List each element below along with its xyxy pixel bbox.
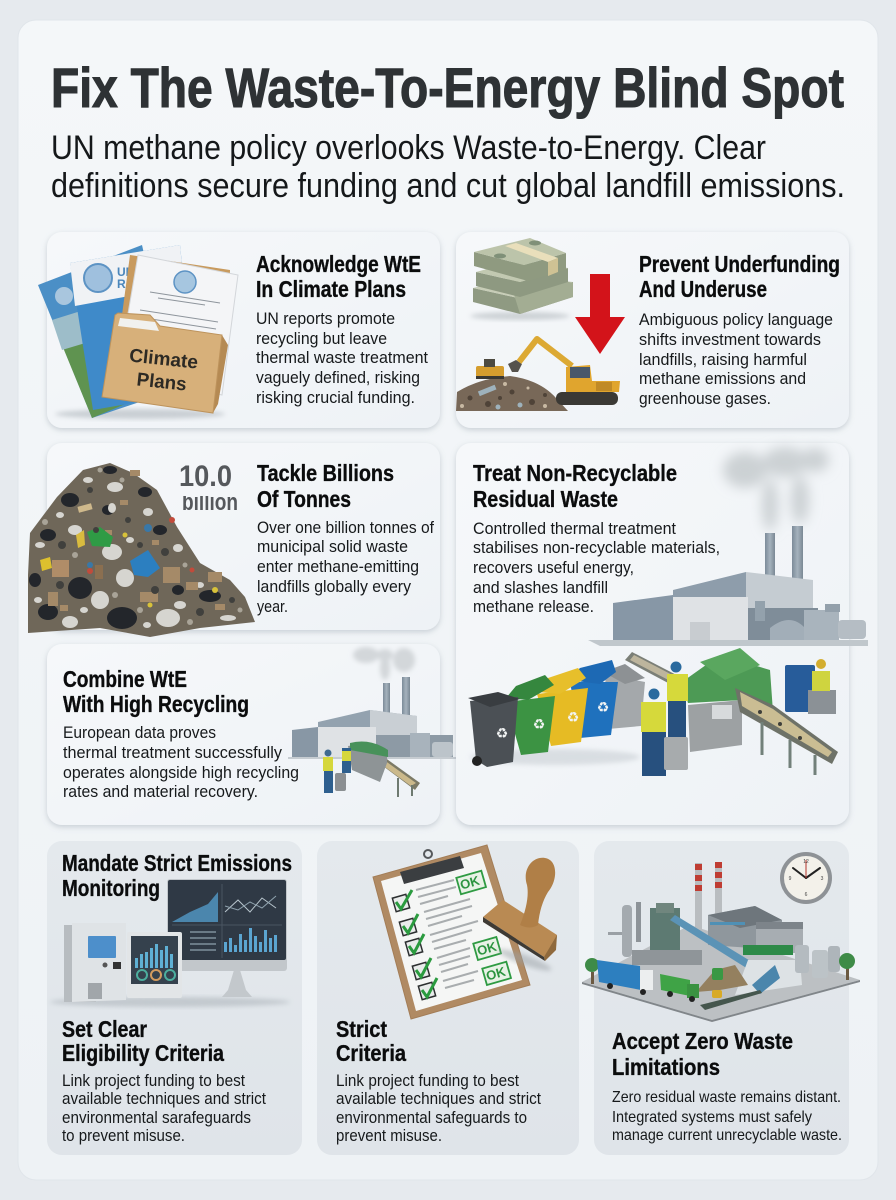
body text: greenhouse gases. (639, 389, 771, 408)
stat: 10.0 billion: billion (182, 489, 238, 516)
icon: small plant with sorting line (288, 647, 456, 797)
body text: prevent misuse. (336, 1126, 442, 1145)
body text: to prevent misuse. (62, 1126, 185, 1145)
heading: mandate strict emissions monitoring: Monitoring (62, 875, 160, 901)
icon: smoke plumes (723, 447, 829, 531)
panel: acknowledge WtE in climate plans (38, 232, 440, 428)
heading: mandate strict emissions monitoring (62, 850, 292, 901)
body text (63, 723, 299, 801)
heading (612, 1028, 793, 1080)
body text: thermal treatment successfully (63, 743, 282, 762)
body text: landfills, raising harmful (639, 350, 807, 369)
panel: strict criteria (317, 841, 579, 1155)
body text (336, 1071, 541, 1145)
subtitle: UN methane policy overlooks Waste-to-Energy. Clear (51, 129, 766, 167)
heading (63, 666, 249, 717)
heading (336, 1016, 406, 1066)
body text: methane emissions and (639, 369, 806, 388)
heading: Limitations (612, 1054, 720, 1080)
icon: climate plan reports and folder: R (117, 277, 126, 291)
body text: Over one billion tonnes of (257, 518, 434, 537)
body text: European data proves (63, 723, 216, 742)
heading: In Climate Plans (256, 276, 406, 302)
panel: treat non-recyclable residual waste (456, 443, 868, 825)
heading: Accept Zero Waste (612, 1028, 793, 1054)
icon: wooden stamp (483, 858, 557, 974)
heading: And Underuse (639, 276, 767, 302)
body text: municipal solid waste (257, 537, 408, 556)
heading: With High Recycling (63, 691, 249, 717)
body text: and slashes landfill (473, 578, 608, 597)
heading: mandate strict emissions monitoring: Mandate Strict Emissions (62, 850, 292, 876)
body text: shifts investment towards (639, 330, 821, 349)
subtitle (51, 129, 845, 205)
heading (256, 251, 421, 302)
icon: waste pile (28, 463, 255, 637)
body text: thermal waste treatment (256, 348, 428, 367)
icon: waste sorting line (625, 648, 838, 776)
body text: available techniques and strict (62, 1089, 266, 1108)
heading (62, 1016, 224, 1066)
icon: checklist clipboard: OK (484, 964, 508, 984)
panel: prevent underfunding and underuse (456, 232, 849, 428)
panel: combine WtE with high recycling (47, 644, 456, 825)
body text: recovers useful energy, (473, 558, 634, 577)
icon: landfill with excavator (456, 339, 620, 411)
body text: Link project funding to best (336, 1071, 519, 1090)
body text: UN reports promote (256, 309, 395, 328)
icon: checklist clipboard: OK (475, 939, 499, 959)
heading: Criteria (336, 1040, 406, 1066)
icon: climate plan reports and folder: Plans (136, 369, 188, 396)
heading: Tackle Billions (257, 460, 394, 486)
heading: Strict (336, 1016, 387, 1042)
icon: red down arrow (575, 274, 625, 354)
icon: cash stacks (470, 238, 573, 320)
body text: rates and material recovery. (63, 782, 258, 801)
icon: climate plan reports and folder (38, 245, 238, 419)
body text: available techniques and strict (336, 1089, 541, 1108)
body text: Integrated systems must safely (612, 1109, 812, 1126)
icon: wall clock: 12 (803, 859, 809, 865)
heading: Acknowledge WtE (256, 251, 421, 277)
icon: recycling bins: ♻ (597, 699, 609, 715)
icon: monitoring equipment and dashboards (50, 879, 290, 1007)
heading: Set Clear (62, 1016, 147, 1042)
panel: tackle billions of tonnes (28, 443, 440, 637)
heading (639, 251, 840, 302)
heading: Residual Waste (473, 486, 618, 512)
icon: wall clock: 9 (789, 876, 792, 882)
heading: Prevent Underfunding (639, 251, 840, 277)
icon: thermal treatment plant (588, 526, 868, 646)
body text: environmental sarafeguards (62, 1108, 251, 1127)
body text: Link project funding to best (62, 1071, 245, 1090)
icon: climate plan reports and folder: Climate (128, 345, 199, 374)
body text: year. (257, 597, 288, 616)
icon: recycling bins: ♻ (533, 716, 545, 732)
icon: integrated waste facility (582, 862, 860, 1022)
icon: wall clock: 6 (805, 892, 808, 898)
body text: Controlled thermal treatment (473, 519, 676, 538)
body text: methane release. (473, 597, 594, 616)
body text: stabilises non-recyclable materials, (473, 538, 720, 557)
body text: vaguely defined, risking (256, 368, 420, 387)
heading: Of Tonnes (257, 486, 351, 512)
icon: checklist clipboard (373, 845, 530, 1019)
heading: Combine WtE (63, 666, 187, 692)
body text (62, 1071, 266, 1145)
body text: Zero residual waste remains distant. (612, 1089, 841, 1106)
body text: Ambiguous policy language (639, 310, 833, 329)
body text (473, 519, 720, 616)
heading: Treat Non-Recyclable (473, 460, 677, 486)
body text: enter methane-emitting (257, 557, 419, 576)
stat: 10.0 billion: 10.0 (179, 460, 232, 493)
body text (256, 309, 428, 407)
heading (473, 460, 677, 512)
panel: accept zero waste limitations (582, 841, 860, 1155)
body text (257, 518, 434, 616)
icon: climate plan reports and folder: UN (117, 265, 134, 279)
body text: environmental safeguards to (336, 1108, 527, 1127)
heading: Eligibility Criteria (62, 1040, 224, 1066)
icon: recycling bins: ♻ (567, 709, 579, 725)
icon: recycling bins: ♻ (496, 725, 508, 741)
icon: wall clock: 3 (821, 876, 824, 882)
body text: risking crucial funding. (256, 388, 415, 407)
stat: 10.0 billion (180, 465, 237, 510)
heading (257, 460, 394, 512)
body text: landfills globally every (257, 577, 411, 596)
body text (612, 1089, 842, 1144)
body text (639, 310, 833, 408)
body text: recycling but leave (256, 329, 387, 348)
panel: set clear eligibility criteria (47, 841, 302, 1155)
body text: manage current unrecyclable waste. (612, 1127, 842, 1144)
icon: wall clock (780, 852, 832, 904)
body text: operates alongside high recycling (63, 763, 299, 782)
icon: recycling bins (468, 660, 645, 767)
icon: checklist clipboard: OK (458, 873, 482, 893)
